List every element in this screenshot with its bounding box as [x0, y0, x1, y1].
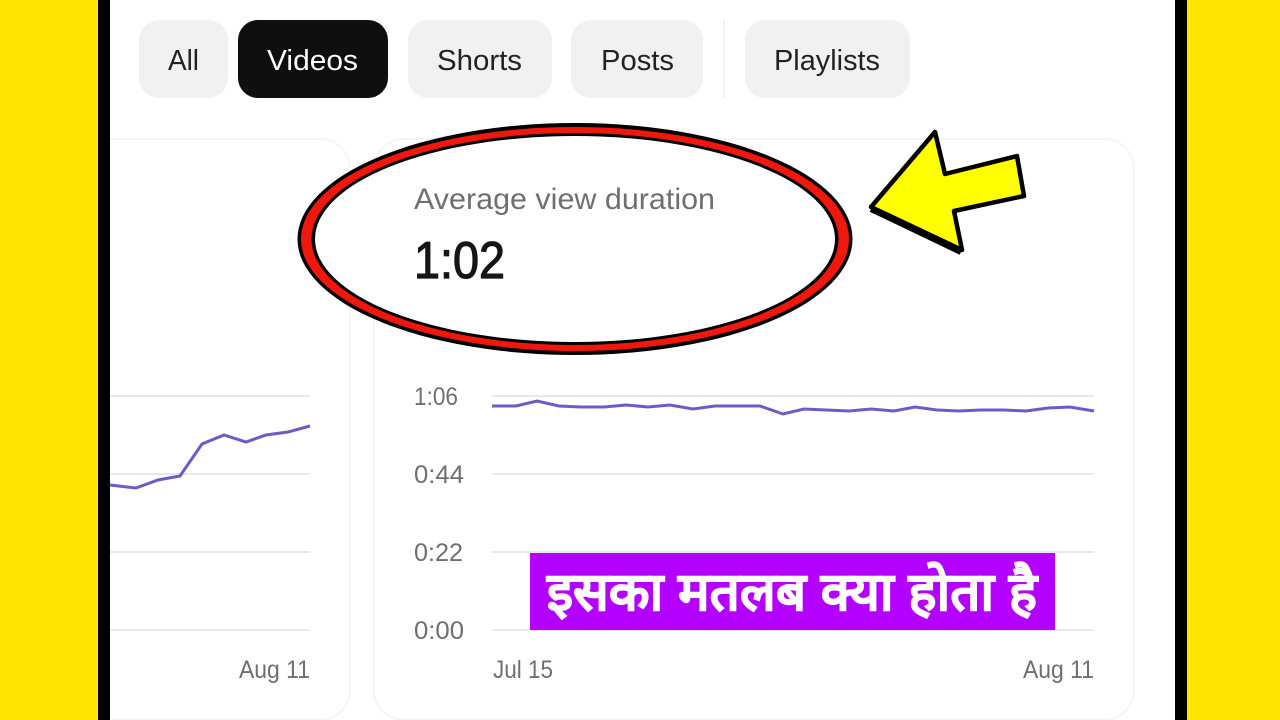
- tab: Shorts: Shorts: [437, 45, 522, 77]
- left card date label: Aug 11: [239, 656, 310, 684]
- left card line chart: [110, 426, 310, 488]
- grid lines and y-axis labels: 0:22: [414, 539, 463, 567]
- tab: Posts: [571, 20, 703, 98]
- right card line chart: [492, 401, 1094, 414]
- tab: Videos: [238, 20, 388, 98]
- left yellow border: [0, 0, 110, 720]
- grid lines and y-axis labels: 0:00: [414, 617, 464, 645]
- grid lines and y-axis labels: 1:06: [414, 383, 458, 411]
- date labels: Aug 11: [1023, 656, 1094, 684]
- tab: All: All: [168, 45, 199, 77]
- tab: Playlists: [745, 20, 910, 98]
- tab bar: [139, 20, 910, 98]
- right yellow border: [1175, 0, 1280, 720]
- tab: Posts: Posts: [601, 45, 674, 77]
- left card: [110, 139, 350, 720]
- grid lines and y-axis labels: [414, 383, 1094, 645]
- metric label: Average view duration: [414, 183, 715, 216]
- tab: Shorts: [408, 20, 552, 98]
- tab: Videos: Videos: [267, 45, 358, 77]
- right card: [374, 139, 1134, 720]
- tab: Playlists: Playlists: [774, 45, 880, 77]
- yellow arrow: [871, 132, 1024, 252]
- date labels: Jul 15: [493, 656, 553, 684]
- grid lines and y-axis labels: 0:44: [414, 461, 464, 489]
- metric value: 1:02: [414, 232, 505, 290]
- purple caption banner: इसका मतलब क्या होता है: [546, 561, 1039, 622]
- date labels: [493, 656, 1094, 684]
- red ellipse highlight: [298, 123, 852, 355]
- tab: All: [139, 20, 228, 98]
